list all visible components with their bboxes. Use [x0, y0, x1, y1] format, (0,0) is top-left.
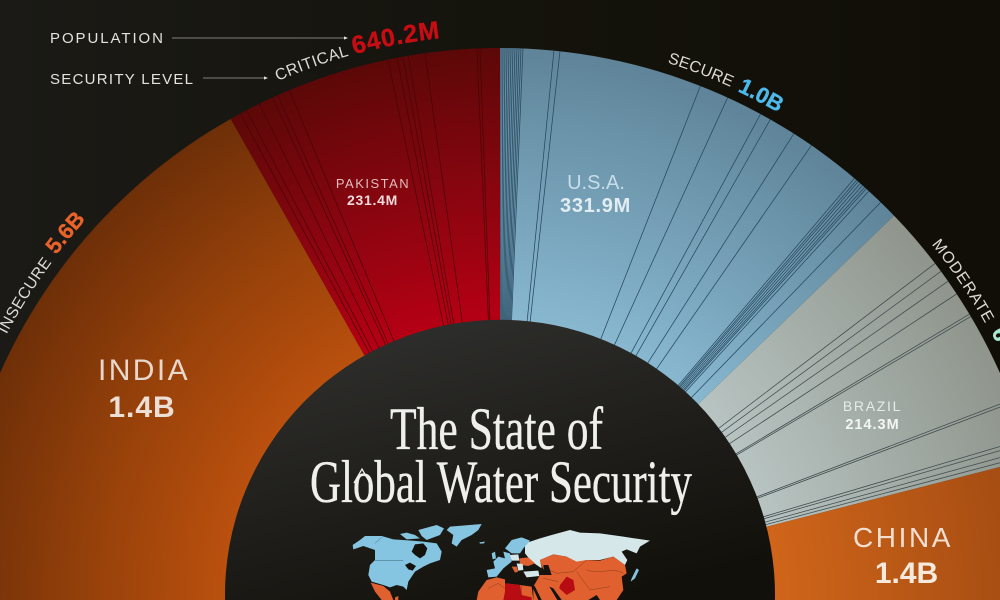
world map [353, 524, 650, 600]
label: USA: 331.9M [560, 195, 631, 217]
label: China: CHINA [853, 522, 953, 553]
arc label: critical: 640.2M [352, 21, 439, 54]
arc label: secure: 1.0B [738, 80, 783, 110]
title: The State of [390, 396, 603, 462]
label: China: 1.4B [875, 557, 938, 590]
centre circle [225, 320, 775, 600]
legend: population: POPULATION [50, 30, 163, 47]
label: India: INDIA [98, 354, 190, 387]
arc label: moderate: MODERATE [932, 238, 994, 323]
arc label: secure: SECURE [668, 53, 734, 87]
label: Pakistan: 231.4M [347, 192, 398, 208]
label: Pakistan: PAKISTAN [336, 176, 410, 191]
segment: insecure India [0, 119, 364, 600]
label: Brazil: 214.3M [845, 417, 900, 433]
label: China [853, 522, 953, 590]
label: Brazil [843, 398, 902, 433]
label: Brazil: BRAZIL [843, 398, 902, 414]
label: India [98, 354, 190, 424]
segment: critical [230, 48, 500, 356]
map: Russia, Asia [525, 530, 650, 600]
arc label: insecure [0, 212, 84, 334]
segment: moderate [698, 216, 1000, 527]
label: USA [560, 172, 631, 217]
title: Global Water Security [310, 449, 692, 515]
segment: insecure China [766, 467, 1000, 600]
segment: secure [500, 48, 894, 404]
map: North America and Greenland [353, 524, 485, 600]
title [310, 396, 692, 515]
legend: security level [50, 71, 268, 88]
label: India: 1.4B [108, 391, 176, 424]
arc label: critical [276, 21, 439, 80]
map: Europe, Africa, Middle East [477, 537, 575, 600]
legend: population [50, 30, 348, 47]
legend: security level: SECURITY LEVEL [50, 71, 193, 88]
label: USA: U.S.A. [567, 172, 625, 194]
label: Pakistan [336, 176, 410, 208]
arc label: secure [668, 53, 783, 110]
arc label: insecure: 5.6B [45, 212, 84, 254]
arc label: critical: CRITICAL [276, 46, 348, 80]
